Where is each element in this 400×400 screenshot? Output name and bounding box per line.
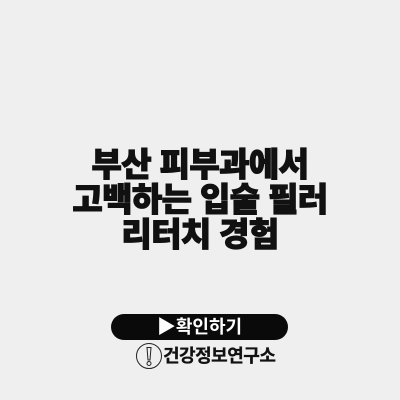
button: confirm: ▶확인하기: [157, 317, 242, 338]
title: [72, 146, 328, 253]
title: 부산 피부과에서: [92, 146, 308, 183]
button: confirm: [111, 314, 288, 340]
icon: exclamation circle: [136, 343, 162, 369]
title: 리터치 경험: [121, 216, 279, 253]
brand name: 건강정보연구소: [163, 346, 275, 366]
brand logo: [136, 343, 276, 369]
title: 고백하는 입술 필러: [72, 181, 328, 218]
